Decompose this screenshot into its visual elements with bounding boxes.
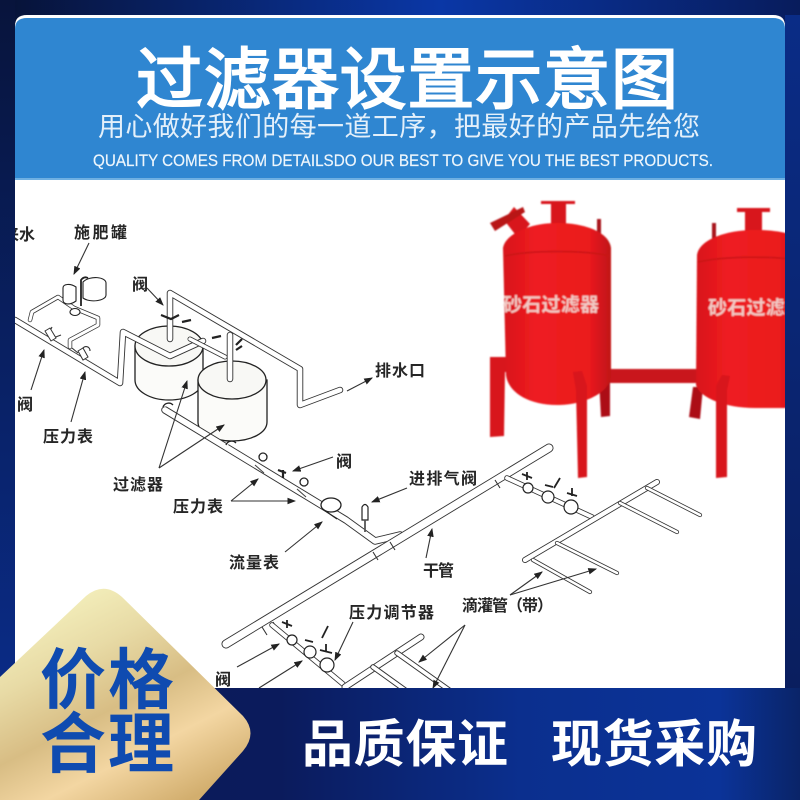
english tagline: QUALITY COMES FROM DETAILSDO OUR BEST TO GIVE YOU THE BEST PRODUCTS. [93,151,713,170]
diagram labels: 阀 [17,396,33,414]
title: 过滤器设置示意图 [136,43,678,118]
diagram labels: 压力调节器 [349,604,434,622]
tank 2 top nozzle [737,208,770,232]
tank 2 front leg [716,375,730,478]
tank 1 top nozzle [541,201,575,224]
slogan right: 现货采购 [551,716,757,773]
diagram labels: 压力表 [43,428,93,446]
tank 1 dome seam [505,252,610,256]
tank 1 label: 砂石过滤器 [503,294,599,316]
diagram labels: 阀 [132,276,148,294]
diagram labels: 施肥罐 [74,223,127,242]
panel: blue header [15,15,785,180]
tank 1 back leg [599,380,610,417]
tank 1 left leg [490,357,508,437]
diagram labels: 流量表 [229,553,279,572]
tank 1 front leg [573,371,587,478]
tank 1 body [503,223,611,405]
tank 1 vent [597,219,601,235]
callout arrows [31,243,596,688]
slogan left: 品质保证 [302,716,508,773]
diagram labels: 压力表 [173,498,223,516]
diagram labels: 阀 [336,453,352,471]
diagram labels [3,223,553,689]
diagram labels: 来水 [3,226,35,244]
diagram labels: 滴灌管（带） [462,596,553,615]
filter tank 1 [135,326,203,400]
lower supply pipe [163,403,400,541]
diagram labels: 过滤器 [113,476,163,494]
bottom band [0,688,800,800]
badge text line 2: 合理 [40,707,174,781]
main trunk pipe [226,448,549,644]
tank 1 side nozzle [490,207,530,238]
connecting pipe [608,369,698,383]
fertilizer tanks [63,277,106,316]
gold price badge [0,589,250,800]
diagram labels: 阀 [215,671,231,689]
diagram labels: 排水口 [375,362,425,380]
backwash pipe to drain [161,293,340,405]
diagram labels: 干管 [423,561,454,580]
panel: white diagram area [15,178,785,688]
tank 2 back leg [689,387,703,419]
badge text line 1: 价格 [40,643,174,717]
lower valve branch and laterals [272,620,449,690]
tank 2 body [694,229,785,410]
inlet pipe with fertilizer loop [15,297,203,383]
filter tank 2 [198,361,267,441]
tank 2 dome seam [698,257,800,262]
chart: drip irrigation pipe schematic [3,223,700,690]
diagram labels: 进排气阀 [409,470,477,488]
tank 2 vent [712,223,716,239]
upper valve branch and laterals [507,472,700,592]
subtitle: 用心做好我们的每一道工序，把最好的产品先给您 [98,112,700,142]
product photo: red sand filter tanks [490,201,800,478]
